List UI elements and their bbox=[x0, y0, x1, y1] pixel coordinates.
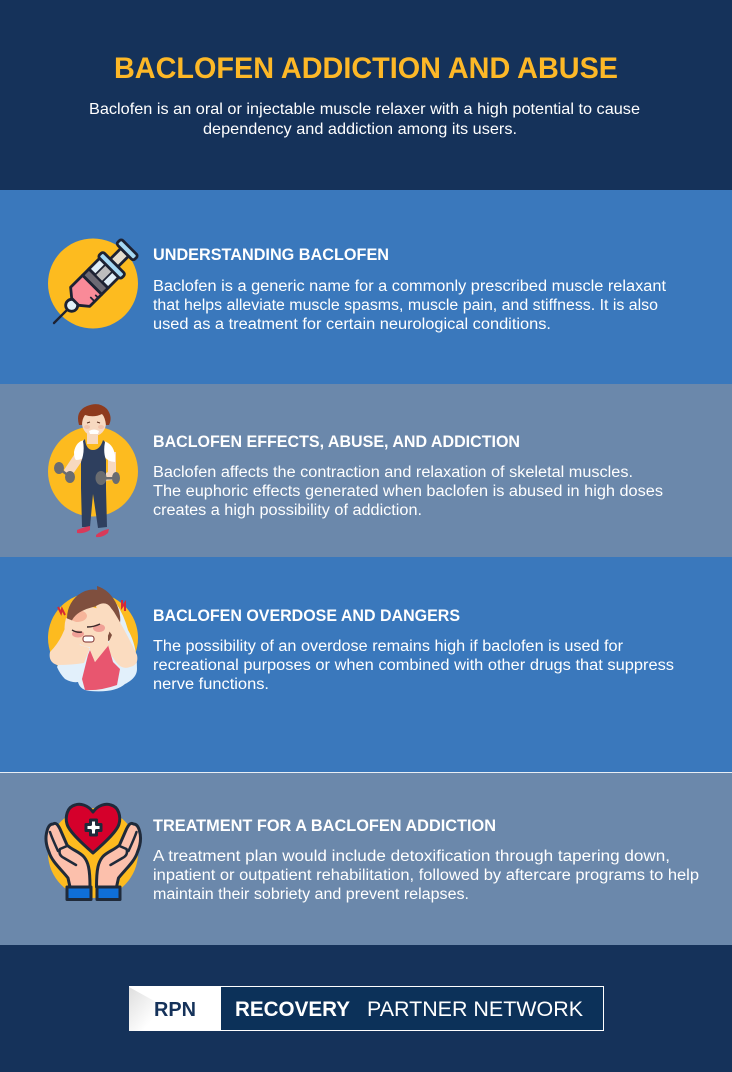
panel: treatment bbox=[0, 773, 732, 945]
body text: used as a treatment for certain neurological conditions. bbox=[153, 316, 551, 333]
icon: woman with headache bbox=[48, 586, 138, 691]
panel: understanding baclofen bbox=[0, 190, 732, 384]
footer logo: PARTNER NETWORK bbox=[367, 998, 583, 1021]
body text bbox=[153, 848, 699, 903]
body text: A treatment plan would include detoxification through tapering down, bbox=[153, 848, 670, 865]
heading: TREATMENT FOR A BACLOFEN ADDICTION bbox=[153, 817, 496, 835]
body text: The possibility of an overdose remains high if baclofen is used for bbox=[153, 638, 623, 655]
body text: nerve functions. bbox=[153, 676, 269, 693]
body text bbox=[153, 464, 663, 519]
icon: syringe bbox=[43, 236, 141, 334]
body text: recreational purposes or when combined with other drugs that suppress bbox=[153, 657, 674, 674]
body text: maintain their sobriety and prevent relapses. bbox=[153, 886, 469, 903]
intro text: dependency and addiction among its users. bbox=[203, 121, 517, 138]
body text bbox=[153, 638, 674, 693]
body text: The euphoric effects generated when baclofen is abused in high doses bbox=[153, 483, 663, 500]
panel: overdose and dangers bbox=[0, 557, 732, 772]
intro text bbox=[89, 101, 640, 138]
intro text: Baclofen is an oral or injectable muscle relaxer with a high potential to cause bbox=[89, 101, 640, 118]
footer logo: RPN bbox=[154, 999, 196, 1021]
body text: Baclofen is a generic name for a commonly prescribed muscle relaxant bbox=[153, 278, 667, 295]
panel: header bbox=[0, 0, 732, 190]
body text: creates a high possibility of addiction. bbox=[153, 502, 422, 519]
panel: effects, abuse, addiction bbox=[0, 384, 732, 557]
heading: BACLOFEN OVERDOSE AND DANGERS bbox=[153, 607, 460, 625]
heading: UNDERSTANDING BACLOFEN bbox=[153, 246, 389, 264]
body text: Baclofen affects the contraction and relaxation of skeletal muscles. bbox=[153, 464, 633, 481]
icon: hands holding heart bbox=[46, 804, 141, 900]
heading: BACLOFEN EFFECTS, ABUSE, AND ADDICTION bbox=[153, 433, 520, 451]
title: BACLOFEN ADDICTION AND ABUSE bbox=[114, 52, 618, 85]
icon: weightlifter bbox=[48, 404, 138, 537]
body text: that helps alleviate muscle spasms, muscle pain, and stiffness. It is also bbox=[153, 297, 658, 314]
footer logo: RECOVERY bbox=[235, 998, 350, 1021]
footer logo bbox=[129, 986, 604, 1031]
body text bbox=[153, 278, 667, 333]
body text: inpatient or outpatient rehabilitation, followed by aftercare programs to help bbox=[153, 867, 699, 884]
